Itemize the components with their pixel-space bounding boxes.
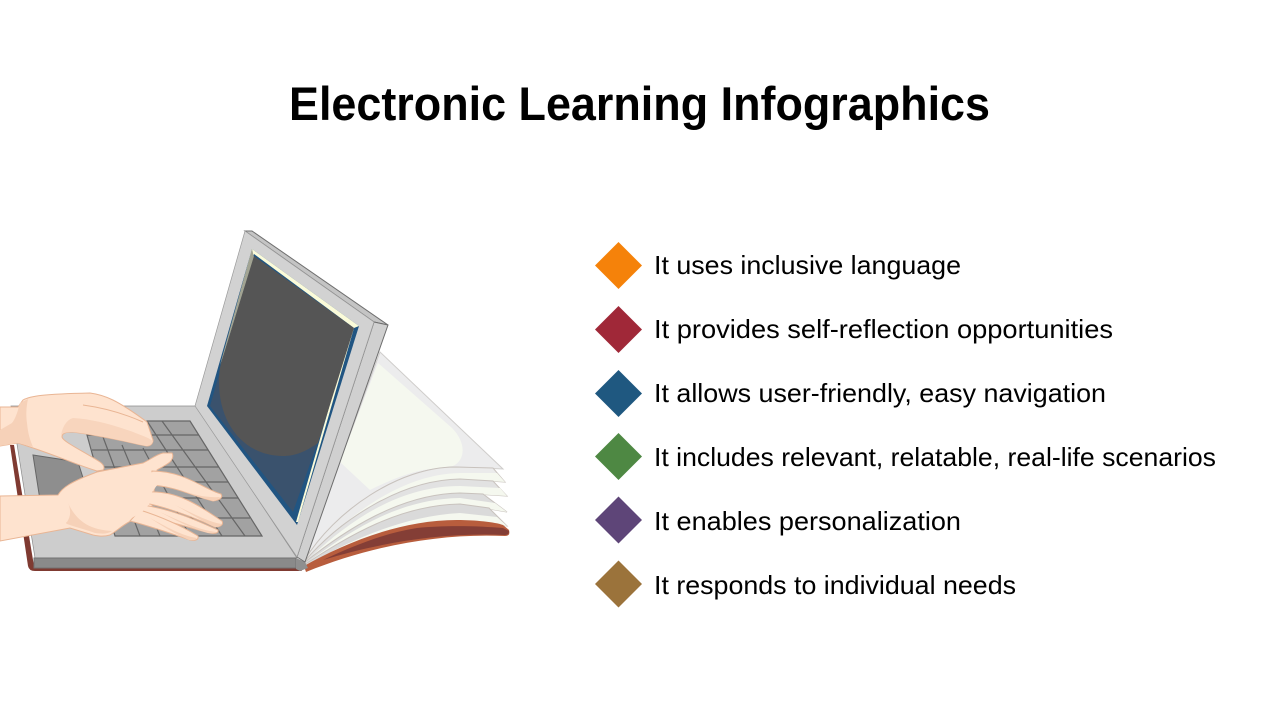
item 5: It enables personalization (654, 506, 961, 536)
item 6 (595, 560, 1016, 608)
item 3 (595, 370, 1106, 417)
item 3: It allows user-friendly, easy navigation (654, 378, 1106, 408)
item 6: It responds to individual needs (654, 570, 1016, 600)
item 2 (595, 306, 1113, 353)
front hand palm (0, 453, 173, 541)
title: Electronic Learning Infographics (289, 77, 990, 130)
keyboard (87, 421, 262, 536)
book pages and cover (304, 352, 509, 572)
item 4: It includes relevant, relatable, real-life scenarios (654, 442, 1216, 472)
laptop screen lid (195, 231, 388, 562)
item 4 (595, 433, 1216, 480)
list of e-learning features (595, 242, 1216, 608)
laptop base (10, 406, 308, 571)
item 1: It uses inclusive language (654, 250, 961, 280)
back hand (0, 393, 153, 471)
item 2: It provides self-reflection opportunities (654, 314, 1113, 344)
front hand fingers (150, 471, 222, 501)
item 5 (595, 496, 961, 544)
trackpad (33, 455, 90, 500)
illustration: laptop on open book with typing hands (0, 231, 509, 572)
hands typing (0, 393, 223, 541)
screen dark area (219, 256, 354, 456)
item 1 (595, 242, 961, 289)
